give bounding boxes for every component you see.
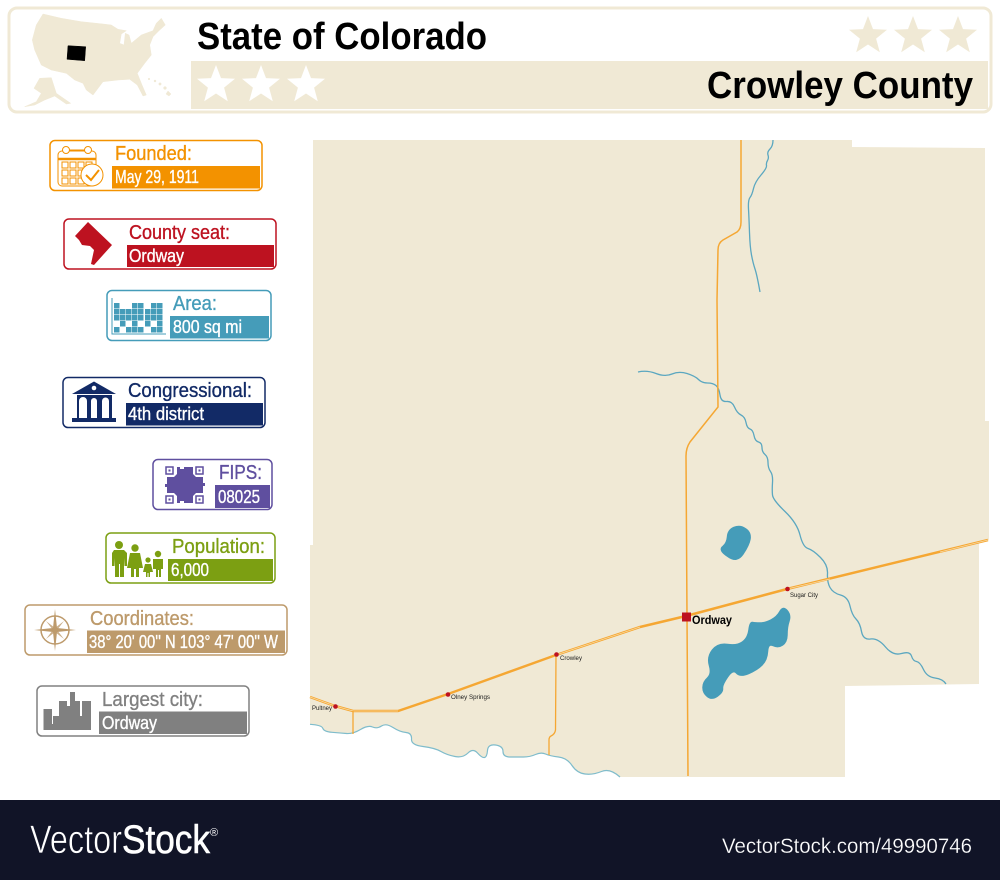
label: largest city: Largest city: — [102, 689, 203, 711]
road spur pultney — [352, 711, 354, 734]
card: fips — [153, 460, 272, 510]
header band — [191, 61, 988, 109]
card: area — [107, 290, 271, 340]
town: pultney: Pultney — [312, 705, 333, 712]
town: ordway: Ordway — [692, 613, 732, 627]
value: founded: May 29, 1911 — [115, 167, 199, 187]
white stars — [197, 65, 325, 101]
icon: compass — [34, 609, 76, 651]
icon: county seat shape — [75, 222, 112, 265]
logo — [30, 818, 211, 862]
icon: family — [112, 541, 163, 577]
value: largest city: Ordway — [102, 713, 157, 733]
label: area: Area: — [173, 293, 217, 315]
road north-south — [686, 140, 741, 776]
image id: VectorStock.com/49990746 — [722, 835, 972, 858]
road spur crowley — [549, 655, 556, 755]
icon: USA locator map — [25, 14, 171, 107]
value: fips: 08025 — [218, 487, 260, 507]
icon: calendar — [58, 146, 103, 186]
title: State of Colorado — [197, 16, 487, 58]
river north — [748, 140, 773, 292]
logo: Vector — [30, 818, 122, 862]
south boundary river — [310, 724, 620, 777]
town: sugar city: Sugar City — [790, 592, 819, 599]
icon: area grid — [112, 298, 166, 334]
label: congressional: Congressional: — [128, 380, 252, 402]
card: county seat — [64, 219, 276, 269]
label: county seat: County seat: — [129, 222, 230, 244]
icon: Colorado highlight — [67, 46, 86, 61]
value: coordinates: 38° 20' 00'' N 103° 47' 00'' W — [89, 632, 278, 652]
card: largest city — [37, 686, 249, 736]
value: congressional: 4th district — [128, 404, 204, 424]
value: area: 800 sq mi — [173, 317, 242, 337]
label: founded: Founded: — [115, 143, 192, 165]
label: population: Population: — [172, 536, 265, 558]
lake small — [721, 526, 750, 559]
town: sugar city — [785, 587, 819, 599]
panel: header — [9, 8, 991, 112]
label: coordinates: Coordinates: — [90, 608, 194, 630]
icon: QR chip — [165, 467, 205, 503]
subtitle: Crowley County — [707, 65, 973, 107]
town: crowley: Crowley — [560, 655, 583, 662]
river east — [638, 371, 946, 684]
road east-west centre line — [310, 540, 988, 711]
footer bar — [0, 800, 1000, 880]
town: olney springs: Olney Springs — [451, 694, 491, 701]
logo: Stock — [122, 818, 211, 862]
value: county seat: Ordway — [129, 246, 184, 266]
town: olney springs — [446, 692, 491, 701]
value: population: 6,000 — [171, 560, 209, 580]
lake large — [703, 608, 790, 698]
card: congressional — [63, 378, 265, 428]
card: founded — [50, 140, 262, 190]
panel: county map — [310, 140, 989, 777]
icon: capitol building — [72, 382, 116, 422]
road east-west — [310, 540, 988, 711]
icon: skyline — [44, 692, 91, 730]
card: coordinates — [25, 605, 287, 655]
town: crowley — [554, 652, 583, 662]
card: population — [106, 533, 275, 583]
beige stars — [849, 16, 977, 52]
county shape — [310, 140, 989, 777]
registered mark: ® — [210, 827, 218, 839]
label: fips: FIPS: — [219, 462, 262, 484]
